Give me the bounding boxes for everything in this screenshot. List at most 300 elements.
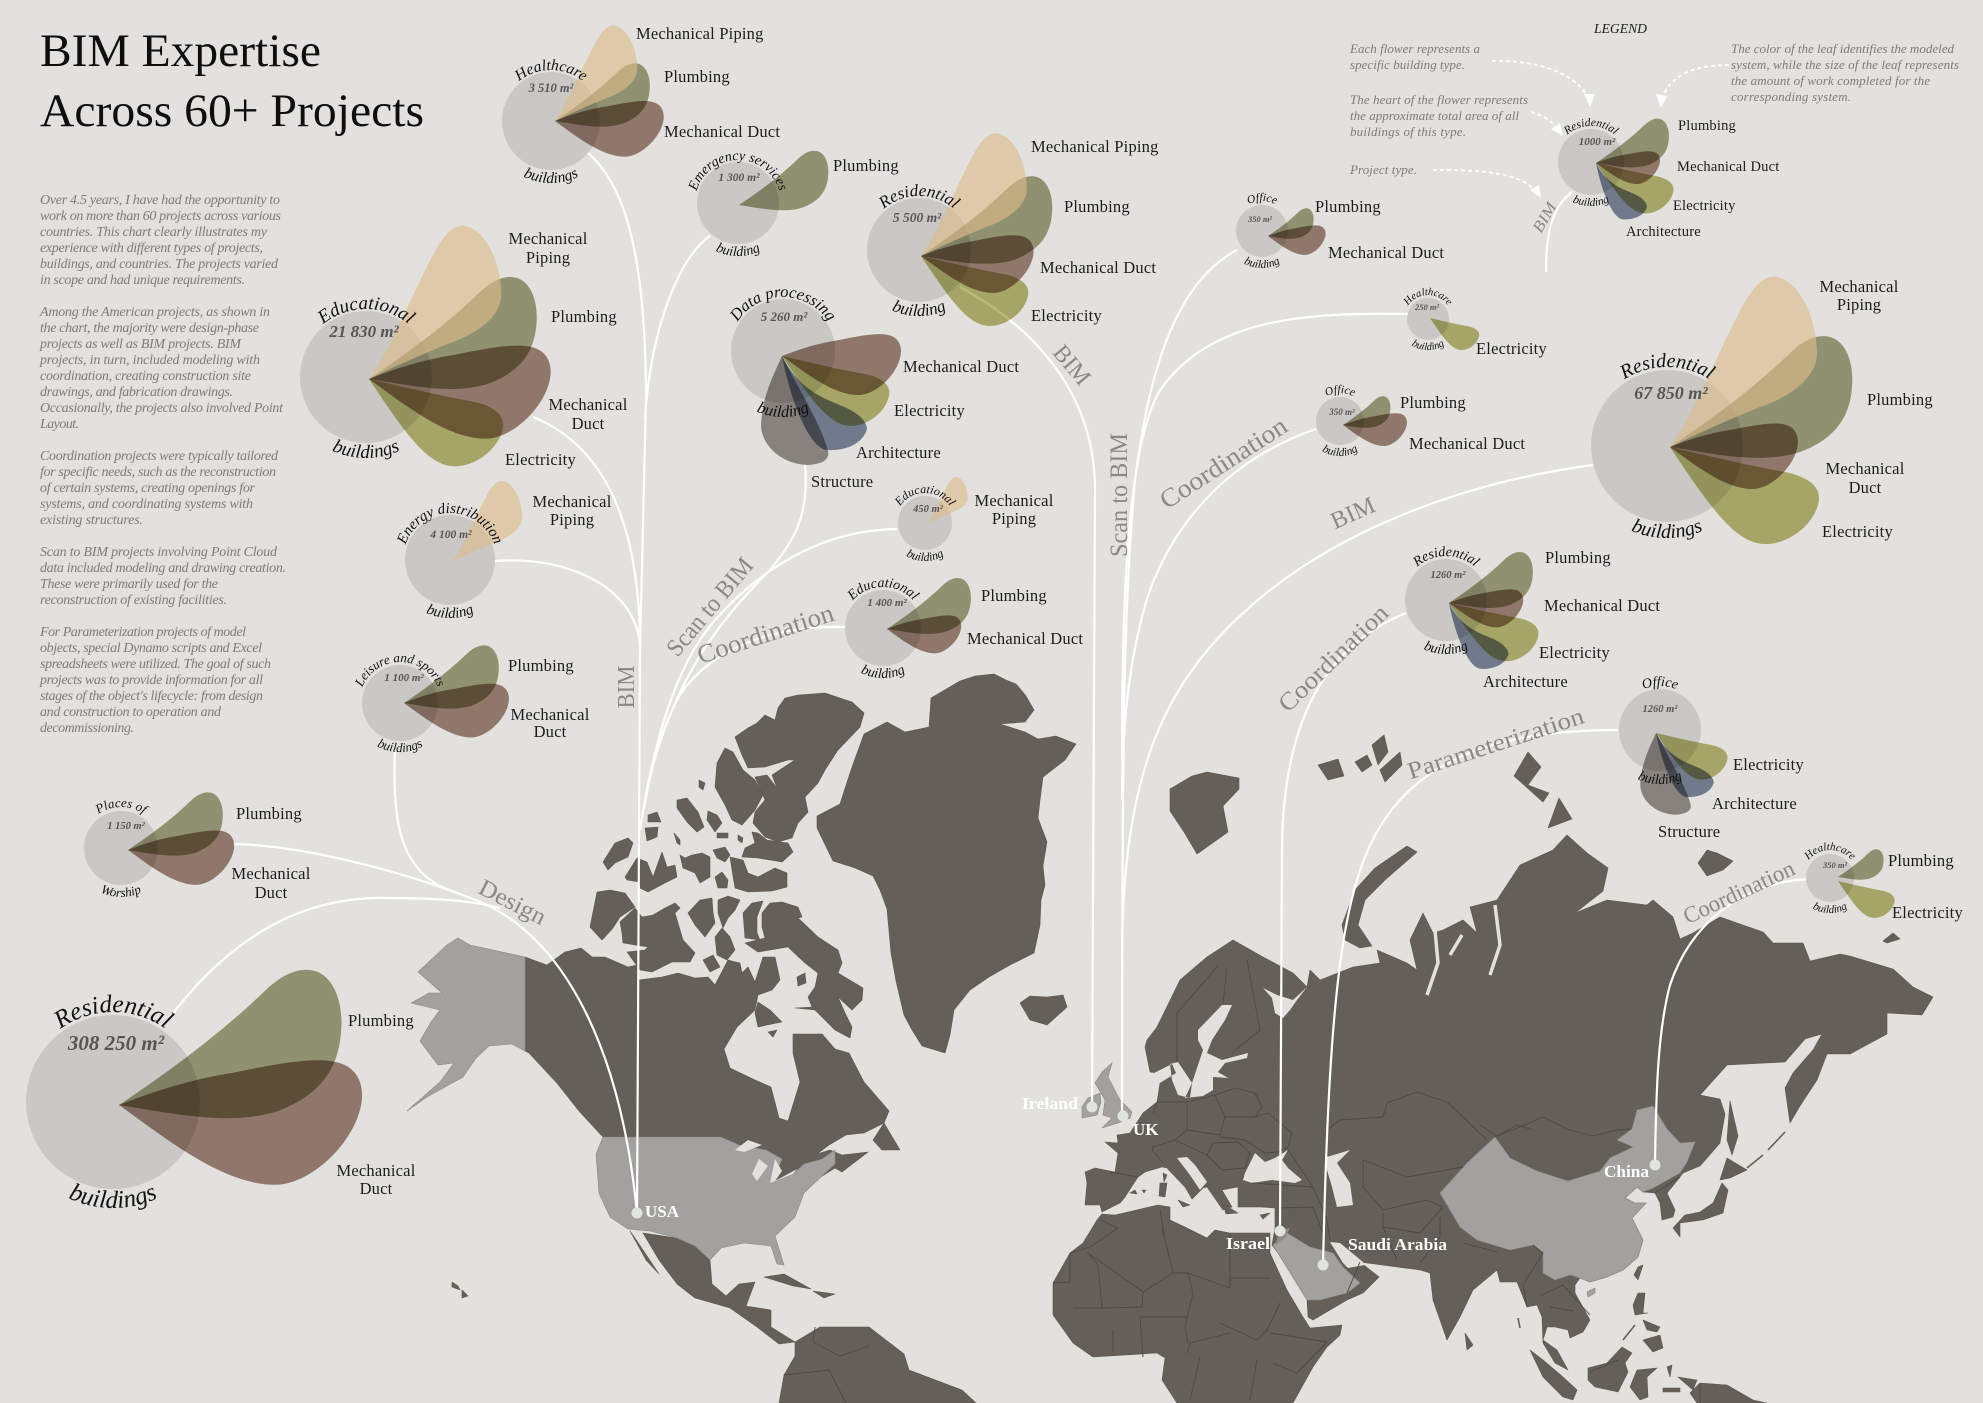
body text: work on more than 60 projects across various xyxy=(40,209,282,224)
label: Duct xyxy=(534,722,567,741)
building type: Educational xyxy=(894,486,956,506)
buildings word: buildings xyxy=(332,438,399,460)
label: Duct xyxy=(360,1179,393,1198)
ireland highlighted xyxy=(1082,1093,1101,1118)
flower: emergency services xyxy=(688,150,899,256)
heart xyxy=(1236,205,1288,257)
leaf: mechanical duct xyxy=(1343,413,1407,446)
label: Mechanical xyxy=(1826,459,1905,478)
project type labels xyxy=(474,198,1799,931)
canada xyxy=(525,948,889,1190)
flower: leisure and sports xyxy=(355,645,590,753)
arrow: leaf note xyxy=(1656,65,1729,108)
building type: Educational xyxy=(318,298,416,324)
body text: drawings, and fabrication drawings. xyxy=(40,385,233,400)
label: Piping xyxy=(1837,295,1881,314)
body text: for specific needs, such as the reconstruction xyxy=(40,465,276,480)
building type: Residential xyxy=(54,994,175,1029)
legend building word: building xyxy=(1572,194,1608,206)
body text: Coordination projects were typically tailored xyxy=(40,449,279,464)
label: Mechanical xyxy=(232,864,311,883)
china name: China xyxy=(1604,1162,1649,1181)
body text: Scan to BIM projects involving Point Cloud xyxy=(40,545,278,560)
flower: educational 21 830 xyxy=(300,226,628,469)
label: Plumbing xyxy=(664,67,730,86)
type: design: Design xyxy=(474,875,550,931)
leaf: plumbing xyxy=(921,176,1052,264)
building type: Healthcare xyxy=(514,59,586,82)
flower: educational 450 xyxy=(894,477,1054,562)
body text: data included modeling and drawing creation. xyxy=(40,561,286,576)
leaf: electricity xyxy=(1656,733,1728,780)
building type: Educational xyxy=(847,578,920,600)
legend note: flower xyxy=(1349,41,1480,72)
label: Plumbing xyxy=(981,586,1047,605)
flower: residential 1260 xyxy=(1405,546,1660,691)
label: Mechanical xyxy=(337,1161,416,1180)
label: Plumbing xyxy=(236,804,302,823)
ellesmere island xyxy=(735,693,864,842)
label: Electricity xyxy=(1476,339,1547,358)
legend note: flower: specific building type. xyxy=(1350,57,1465,72)
label: Mechanical Duct xyxy=(1409,434,1525,453)
area: 1260 m² xyxy=(1643,704,1678,715)
building type: Emergency services xyxy=(688,153,786,192)
uk highlighted xyxy=(1095,1063,1132,1128)
links to usa: design xyxy=(168,750,637,1213)
area: 5 260 m² xyxy=(761,309,808,324)
leaf: structure xyxy=(761,356,828,465)
leaf: mechanical duct xyxy=(1268,225,1326,255)
arrow: project type note xyxy=(1433,170,1541,198)
label: Electricity xyxy=(1892,903,1963,922)
leaf: electricity xyxy=(1838,881,1895,918)
area: 1260 m² xyxy=(1431,570,1466,581)
leaf: plumbing xyxy=(369,277,537,389)
building word: building xyxy=(1322,444,1358,456)
flower: office 350 scan to bim xyxy=(1236,192,1444,268)
heart xyxy=(1407,298,1449,340)
legend heart xyxy=(1558,129,1624,195)
leaf: architecture xyxy=(1656,733,1714,797)
building type: Energy distribution xyxy=(397,502,500,545)
legend note: leaf xyxy=(1731,41,1959,104)
body text: stages of the object's lifecycle: from design xyxy=(40,689,263,704)
label: Electricity xyxy=(1031,306,1102,325)
flower: residential 67 850 xyxy=(1591,276,1933,544)
leaf: plumbing xyxy=(128,792,223,856)
label: Mechanical xyxy=(549,395,628,414)
leaf: plumbing xyxy=(887,578,971,634)
links to usa: scan to bim and coordination xyxy=(640,464,897,830)
links to usa: bim xyxy=(495,152,710,1213)
building type: Residential xyxy=(878,184,962,209)
label: Mechanical xyxy=(509,229,588,248)
legend label: Architecture xyxy=(1626,224,1701,240)
body text: projects was to provide information for all xyxy=(39,673,263,688)
country borders xyxy=(784,960,1700,1403)
legend note: leaf: system, while the size of the leaf represents xyxy=(1731,57,1959,72)
building type: Residential xyxy=(1620,353,1716,380)
leaf: plumbing xyxy=(555,63,650,127)
building type: Office xyxy=(1642,676,1678,690)
islands of eurasia xyxy=(1020,735,1900,1403)
area: 450 m² xyxy=(912,504,944,515)
building word: building xyxy=(426,604,473,618)
body text: existing structures. xyxy=(40,513,143,528)
legend xyxy=(1349,22,1959,240)
label: Mechanical Duct xyxy=(903,357,1019,376)
label: Mechanical xyxy=(975,491,1054,510)
label: Piping xyxy=(526,248,570,267)
building type: Leisure and sports xyxy=(355,654,443,688)
label: Mechanical xyxy=(511,705,590,724)
leaf: mechanical duct xyxy=(555,101,664,157)
label: Electricity xyxy=(505,450,576,469)
body text: in scope and had unique requirements. xyxy=(40,273,245,288)
body text: projects, in turn, included modeling with xyxy=(39,353,260,368)
label: Structure xyxy=(811,472,873,491)
flower: healthcare 350 xyxy=(1804,842,1963,922)
area: 1 100 m² xyxy=(384,672,424,684)
usa marker xyxy=(632,1208,642,1218)
legend leaf: plumbing xyxy=(1596,119,1669,167)
leaf: structure xyxy=(1640,733,1691,815)
leaf: electricity xyxy=(1430,318,1479,350)
heart xyxy=(1316,397,1364,445)
world map xyxy=(407,674,1933,1403)
leaf: electricity xyxy=(1670,447,1819,544)
legend link xyxy=(1546,192,1572,272)
building word: building xyxy=(861,664,904,678)
legend leaf: electricity xyxy=(1596,163,1674,213)
leaf: mechanical duct xyxy=(887,615,961,653)
body text: the chart, the majority were design-phase xyxy=(40,321,259,336)
leaf: mechanical duct xyxy=(369,346,551,439)
flower: residential 5 500 xyxy=(867,133,1159,326)
type: bim ireland: BIM xyxy=(1047,340,1095,391)
great lakes xyxy=(735,1140,797,1183)
leaf: plumbing xyxy=(1268,208,1314,239)
leaf: electricity xyxy=(921,256,1028,326)
legend area: 1000 m² xyxy=(1579,136,1616,148)
label: Electricity xyxy=(1822,522,1893,541)
body text: countries. This chart clearly illustrates my xyxy=(40,225,268,240)
palawan and kuril strokes xyxy=(1518,1132,1785,1340)
leaf: plumbing xyxy=(404,645,499,709)
body text: Layout. xyxy=(39,417,79,432)
label: Duct xyxy=(1849,478,1882,497)
type: scan to bim usa: Scan to BIM xyxy=(661,553,759,662)
heart xyxy=(1591,370,1743,522)
leaf: mechanical duct xyxy=(782,334,901,395)
flower: healthcare 250 xyxy=(1404,288,1547,358)
label: Architecture xyxy=(1712,794,1797,813)
leaf: plumbing xyxy=(119,970,341,1118)
building type: Office xyxy=(1248,192,1277,204)
area: 4 100 m² xyxy=(429,529,472,541)
leaf: plumbing xyxy=(1449,552,1533,608)
label: Structure xyxy=(1658,822,1720,841)
leaf: mechanical duct xyxy=(1449,589,1523,627)
china marker xyxy=(1650,1160,1660,1170)
body text: experience with different types of projects, xyxy=(40,241,263,256)
building type: Office xyxy=(1326,384,1356,396)
heart xyxy=(502,72,600,170)
ireland name: Ireland xyxy=(1022,1094,1079,1113)
area: 3 510 m² xyxy=(528,81,574,95)
legend label: Electricity xyxy=(1673,198,1736,214)
building word: building xyxy=(1412,339,1444,350)
leaf: plumbing xyxy=(1670,336,1852,458)
type: bim usa: BIM xyxy=(614,666,640,708)
area: 1 300 m² xyxy=(718,172,760,184)
leaf: architecture xyxy=(782,356,867,450)
type: coordination usa: Coordination xyxy=(693,598,837,670)
heart xyxy=(697,162,779,244)
label: Duct xyxy=(255,883,288,902)
flower: residential 308 250 xyxy=(26,970,416,1210)
saudi arabia marker xyxy=(1318,1260,1328,1270)
label: Electricity xyxy=(1733,755,1804,774)
buildings word: buildings xyxy=(377,738,422,753)
leaf: architecture xyxy=(1449,603,1508,669)
contiguous usa xyxy=(596,1137,835,1265)
label: Plumbing xyxy=(1315,197,1381,216)
label: Piping xyxy=(550,510,594,529)
area: 350 m² xyxy=(1247,214,1272,224)
usa and alaska highlighted xyxy=(407,938,525,1111)
israel marker xyxy=(1274,1226,1286,1236)
leaf: mechanical duct xyxy=(404,684,509,737)
label: Plumbing xyxy=(508,656,574,675)
leaf: electricity xyxy=(782,356,889,426)
title line 2: Across 60+ Projects xyxy=(40,85,424,137)
body text: Occasionally, the projects also involved Point xyxy=(40,401,284,416)
body text: systems, and coordinating systems with xyxy=(40,497,253,512)
israel name: Israel xyxy=(1226,1234,1270,1253)
saudi arabia name: Saudi Arabia xyxy=(1348,1235,1448,1254)
building type: Places of xyxy=(96,800,150,815)
israel and jordan highlighted xyxy=(1275,1228,1290,1245)
legend note: flower: Each flower represents a xyxy=(1349,41,1480,56)
body text: Among the American projects, as shown in xyxy=(39,305,270,320)
heart xyxy=(362,665,438,741)
type: coordination israel: Coordination xyxy=(1273,599,1395,718)
flower: energy distribution xyxy=(397,480,612,618)
russia gulfs xyxy=(1427,905,1500,995)
legend leaf: mechanical duct xyxy=(1596,151,1660,184)
worship word: Worship xyxy=(102,884,140,898)
body text: decommissioning. xyxy=(40,721,134,736)
link to ireland xyxy=(960,287,1095,1107)
legend note: heart: The heart of the flower represents xyxy=(1350,92,1528,107)
body text: reconstruction of existing facilities. xyxy=(40,593,227,608)
leaf: electricity xyxy=(369,379,503,466)
buildings word: buildings xyxy=(1632,518,1702,540)
south america xyxy=(779,1327,976,1403)
leaf: mechanical duct xyxy=(921,235,1034,293)
uk name: UK xyxy=(1133,1120,1159,1139)
arctic islands xyxy=(590,748,863,1038)
body text: and construction to operation and xyxy=(40,705,222,720)
newfoundland xyxy=(873,1123,900,1150)
legend note: project type: Project type. xyxy=(1349,162,1417,177)
label: Mechanical Duct xyxy=(1040,258,1156,277)
leaf: plumbing xyxy=(1343,396,1390,428)
heart xyxy=(1405,559,1487,641)
eurasia xyxy=(1085,835,1933,1370)
arrow: flower note xyxy=(1492,61,1595,107)
heart xyxy=(405,515,495,605)
link to israel xyxy=(1280,613,1406,1231)
leaf: plumbing xyxy=(739,151,828,210)
area: 21 830 m² xyxy=(328,322,400,341)
building type: Healthcare xyxy=(1404,288,1452,306)
heart xyxy=(1619,689,1701,771)
type: bim uk: BIM xyxy=(1327,492,1379,535)
body text xyxy=(39,193,286,736)
label: Plumbing xyxy=(1888,851,1954,870)
link to china xyxy=(1655,879,1808,1165)
building type: Residential xyxy=(1412,546,1481,567)
label: Electricity xyxy=(1539,643,1610,662)
area: 1 150 m² xyxy=(107,821,146,832)
legend leaf: architecture xyxy=(1596,163,1647,219)
legend building type: Residential xyxy=(1564,118,1620,135)
label: Mechanical Duct xyxy=(664,122,780,141)
label: Plumbing xyxy=(833,156,899,175)
buildings word: buildings xyxy=(524,167,578,184)
leaf: mechanical piping xyxy=(1670,277,1817,447)
leaf: mechanical piping xyxy=(921,133,1027,256)
title line 1: BIM Expertise xyxy=(40,25,321,77)
usa name: USA xyxy=(645,1202,680,1221)
links to uk xyxy=(1122,250,1593,1116)
buildings word: buildings xyxy=(69,1182,156,1210)
label: Plumbing xyxy=(551,307,617,326)
country markers and names xyxy=(632,1094,1660,1270)
legend note: heart xyxy=(1350,92,1528,139)
legend note: heart: buildings of this type. xyxy=(1350,124,1466,139)
heart xyxy=(731,299,835,403)
label: Mechanical Piping xyxy=(1031,137,1159,156)
leaf: mechanical piping xyxy=(369,226,501,379)
leaf: mechanical piping xyxy=(555,26,637,121)
label: Plumbing xyxy=(1400,393,1466,412)
leaf: mechanical duct xyxy=(119,1060,362,1185)
body text: of certain systems, creating openings for xyxy=(40,481,256,496)
legend label: Mechanical Duct xyxy=(1677,159,1779,175)
heart xyxy=(867,198,971,302)
label: Mechanical Duct xyxy=(1328,243,1444,262)
label: Architecture xyxy=(856,443,941,462)
label: Plumbing xyxy=(1545,548,1611,567)
body text: projects as well as BIM projects. BIM xyxy=(39,337,242,352)
label: Plumbing xyxy=(1867,390,1933,409)
building word: building xyxy=(716,242,760,256)
greenland xyxy=(817,674,1076,1053)
leaf: mechanical duct xyxy=(1670,423,1798,489)
leaf: electricity xyxy=(1449,603,1538,661)
heart xyxy=(845,590,921,666)
label: Piping xyxy=(992,509,1036,528)
building word: building xyxy=(1424,640,1468,654)
flower: office 1260 xyxy=(1619,676,1804,841)
legend note: heart: the approximate total area of all xyxy=(1350,108,1519,123)
flower: places of worship xyxy=(84,792,311,902)
label: Mechanical Duct xyxy=(1544,596,1660,615)
heart xyxy=(300,311,432,443)
legend note: leaf: corresponding system. xyxy=(1731,89,1851,104)
china highlighted xyxy=(1440,1106,1695,1282)
body text: coordination, creating construction site xyxy=(40,369,251,384)
link to saudi arabia xyxy=(1323,730,1618,1265)
body text: For Parameterization projects of model xyxy=(39,625,246,640)
building type: Healthcare xyxy=(1804,842,1855,860)
label: Mechanical Duct xyxy=(967,629,1083,648)
heart xyxy=(26,1015,200,1189)
label: Plumbing xyxy=(348,1011,414,1030)
label: Mechanical Piping xyxy=(636,24,764,43)
area: 67 850 m² xyxy=(1634,383,1708,403)
hainan highlighted xyxy=(1587,1288,1595,1297)
body text: objects, special Dynamo scripts and Excel xyxy=(40,641,262,656)
area: 5 500 m² xyxy=(893,210,942,225)
building word: building xyxy=(757,401,808,418)
heart xyxy=(898,496,952,550)
type: coordination uk: Coordination xyxy=(1154,411,1292,515)
body text: spreadsheets were utilized. The goal of such xyxy=(40,657,271,672)
title xyxy=(40,25,424,137)
body text: buildings, and countries. The projects varied xyxy=(40,257,279,272)
legend heading: LEGEND xyxy=(1593,22,1647,37)
africa xyxy=(1053,1205,1342,1403)
flower: data processing xyxy=(730,289,1019,491)
area: 250 m² xyxy=(1414,302,1439,312)
building word: building xyxy=(1638,770,1682,784)
uk marker xyxy=(1118,1110,1128,1122)
heart xyxy=(84,811,158,885)
body text: These were primarily used for the xyxy=(40,577,218,592)
label: Architecture xyxy=(1483,672,1568,691)
label: Duct xyxy=(572,414,605,433)
area: 350 m² xyxy=(1822,860,1847,870)
label: Electricity xyxy=(894,401,965,420)
type: scan to bim uk: Scan to BIM xyxy=(1106,433,1133,557)
flower: office 350 coordination xyxy=(1316,384,1525,456)
building word: building xyxy=(892,300,945,316)
legend note: leaf: the amount of work completed for the xyxy=(1731,73,1930,88)
flower: educational 1 400 xyxy=(845,578,1083,678)
area: 308 250 m² xyxy=(67,1031,165,1055)
flower: healthcare 3 510 xyxy=(502,24,780,184)
heart xyxy=(1806,854,1854,902)
ireland marker xyxy=(1086,1102,1098,1112)
arrow: heart note xyxy=(1531,112,1563,136)
area: 350 m² xyxy=(1328,407,1355,417)
area: 1 400 m² xyxy=(867,597,907,609)
leaf: mechanical duct xyxy=(128,830,234,885)
label: Mechanical xyxy=(1820,277,1899,296)
label: Mechanical xyxy=(533,492,612,511)
mexico and central america xyxy=(452,1231,835,1344)
body text: Over 4.5 years, I have had the opportunity to xyxy=(40,193,280,208)
label: Plumbing xyxy=(1064,197,1130,216)
building word: building xyxy=(1812,902,1847,914)
building type: Data processing xyxy=(730,289,834,322)
connector lines xyxy=(168,152,1808,1265)
